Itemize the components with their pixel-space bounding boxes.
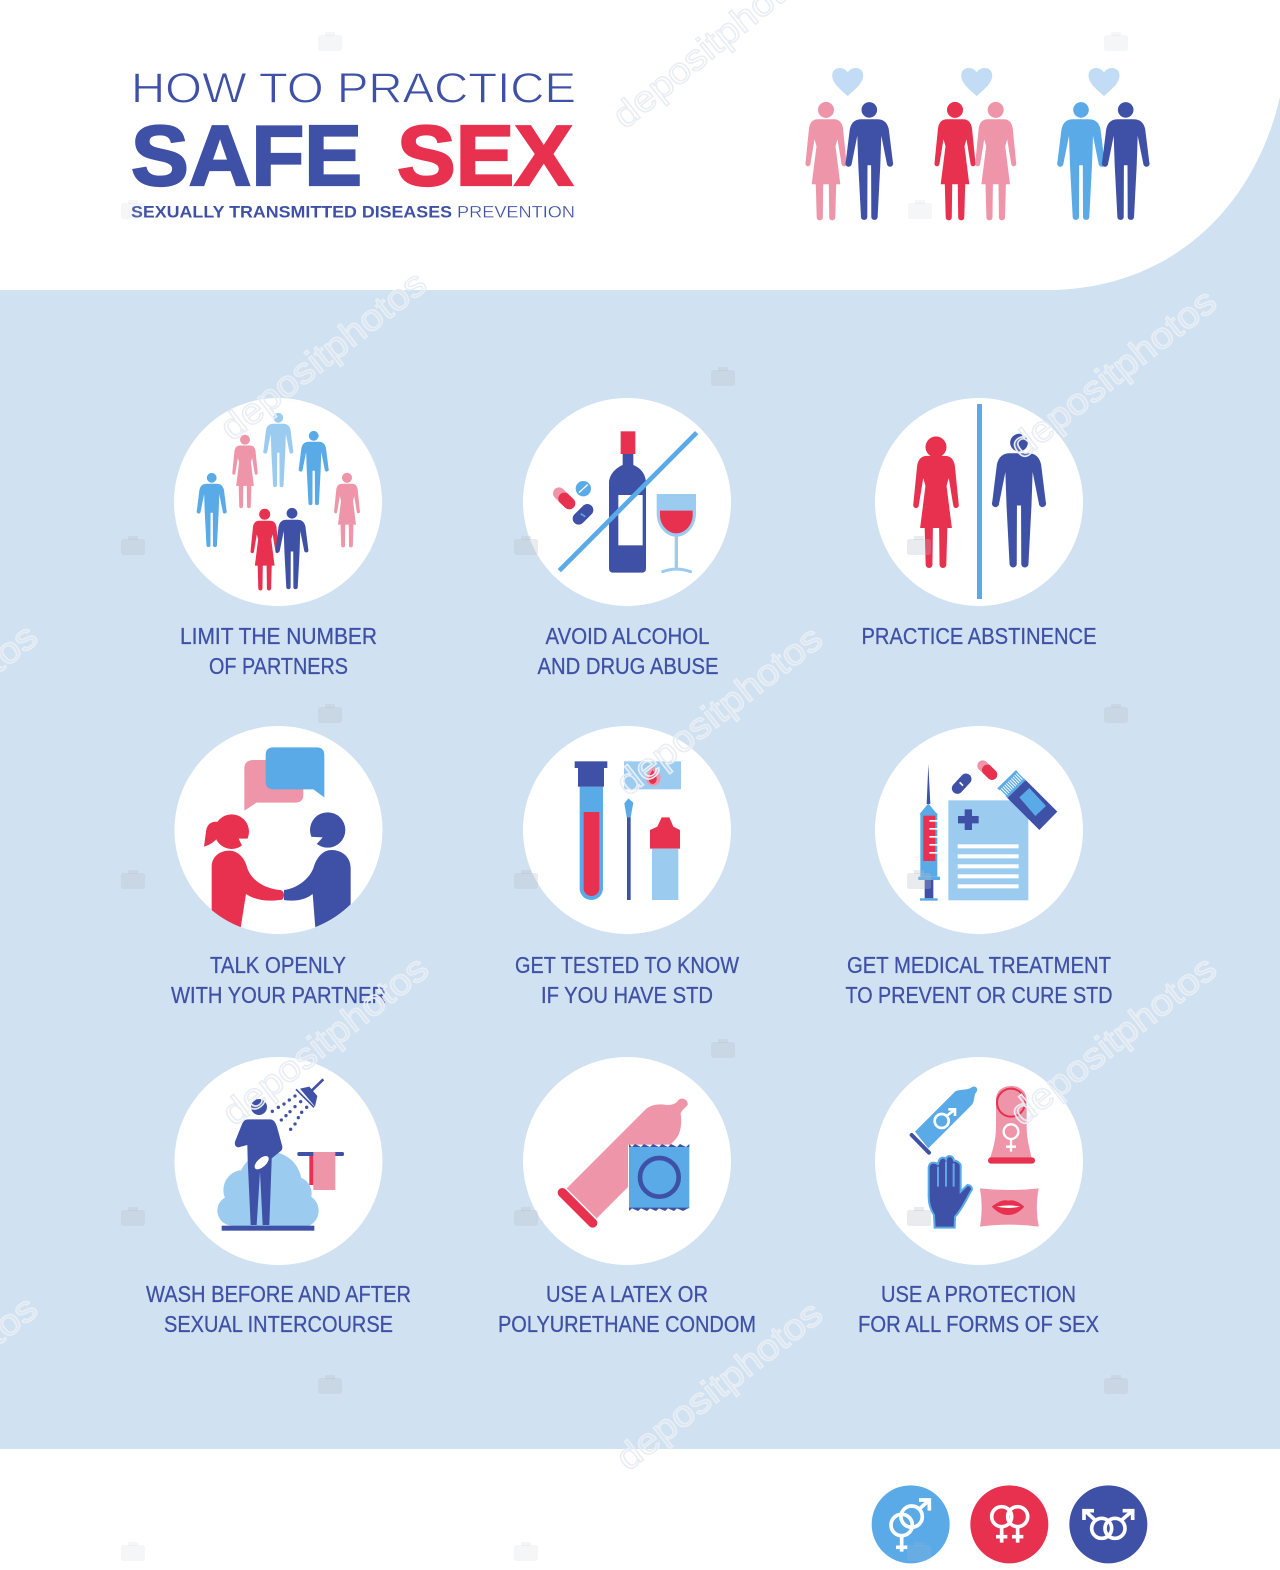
label bbox=[846, 952, 1112, 1008]
icon: two women symbol bbox=[970, 1485, 1048, 1563]
panel: use a protection for all forms of sex bbox=[858, 1057, 1099, 1337]
panel: wash before and after bbox=[146, 1057, 411, 1337]
label bbox=[146, 1281, 411, 1337]
label bbox=[538, 623, 718, 679]
label: IF YOU HAVE STD bbox=[541, 982, 713, 1008]
label: TO PREVENT OR CURE STD bbox=[846, 982, 1112, 1008]
couple: woman and man bbox=[805, 68, 893, 220]
title line: sex: SEX bbox=[397, 109, 573, 204]
icon: two men symbol bbox=[1069, 1485, 1147, 1563]
label bbox=[515, 952, 739, 1008]
icon: syringe, prescription and pills bbox=[875, 726, 1083, 934]
label: WITH YOUR PARTNER bbox=[171, 982, 386, 1008]
title line: safe: SAFE bbox=[131, 109, 362, 204]
label: SEXUAL INTERCOURSE bbox=[164, 1311, 393, 1337]
icon: condom and packet bbox=[523, 1057, 731, 1265]
panel: talk openly with your partner bbox=[171, 726, 386, 1008]
icon: person in shower bbox=[174, 1057, 382, 1265]
label: AND DRUG ABUSE bbox=[538, 653, 718, 679]
label: POLYURETHANE CONDOM bbox=[498, 1311, 756, 1337]
watermark: repeated stock-photo marks: depositphotos bbox=[1002, 280, 1224, 466]
label: WASH BEFORE AND AFTER bbox=[146, 1281, 411, 1307]
icon: woman and man separated bbox=[875, 398, 1083, 606]
label bbox=[171, 952, 386, 1008]
icon: test tube, slide, swab and bottle bbox=[523, 726, 731, 934]
icon: condoms, glove and dental dam bbox=[875, 1057, 1083, 1265]
icon: straight symbol bbox=[872, 1485, 950, 1563]
subtitle light: PREVENTION bbox=[457, 202, 575, 222]
panel: main blue band bbox=[0, 290, 1280, 1449]
title block bbox=[131, 64, 576, 222]
couple: two women bbox=[934, 68, 1016, 220]
icon: two people talking bbox=[174, 726, 382, 953]
label: PRACTICE ABSTINENCE bbox=[862, 623, 1096, 649]
subtitle bold: SEXUALLY TRANSMITTED DISEASES bbox=[131, 202, 452, 222]
label: LIMIT THE NUMBER bbox=[180, 623, 377, 649]
watermark: repeated stock-photo marks: depositphotos bbox=[214, 947, 436, 1133]
panel: avoid alcohol and drug abuse bbox=[523, 398, 731, 679]
label: USE A PROTECTION bbox=[881, 1281, 1076, 1307]
panel: practice abstinence bbox=[862, 398, 1096, 649]
label: OF PARTNERS bbox=[209, 653, 348, 679]
icon: group of people bbox=[174, 398, 382, 606]
label: TALK OPENLY bbox=[210, 952, 346, 978]
label bbox=[180, 623, 377, 679]
label: GET MEDICAL TREATMENT bbox=[847, 952, 1111, 978]
label: USE A LATEX OR bbox=[546, 1281, 708, 1307]
panel: get tested to know if you have std bbox=[515, 726, 739, 1008]
label: FOR ALL FORMS OF SEX bbox=[858, 1311, 1099, 1337]
icon: three couples with hearts bbox=[805, 68, 1150, 220]
watermark: repeated stock-photo marks: depositphotos bbox=[608, 617, 830, 803]
panel: limit the number of partners bbox=[174, 398, 382, 679]
title line: how to practice: HOW TO PRACTICE bbox=[131, 64, 576, 112]
couple: two men bbox=[1057, 68, 1150, 220]
header background curve bbox=[1055, 97, 1280, 290]
panel: use a latex or polyurethane condom bbox=[498, 1057, 756, 1337]
label bbox=[498, 1281, 756, 1337]
panel: get medical treatment bbox=[846, 726, 1112, 1008]
watermark: repeated stock-photo marks: depositphotos bbox=[212, 262, 434, 448]
label bbox=[858, 1281, 1099, 1337]
icons: orientation symbols bbox=[872, 1485, 1147, 1563]
watermark: repeated stock-photo marks: depositphotos bbox=[1002, 947, 1224, 1133]
icon: bottle, glass and pills crossed out bbox=[523, 398, 731, 606]
watermark: repeated stock-photo marks: depositphotos bbox=[608, 1292, 830, 1478]
label: GET TESTED TO KNOW bbox=[515, 952, 739, 978]
label: AVOID ALCOHOL bbox=[546, 623, 710, 649]
